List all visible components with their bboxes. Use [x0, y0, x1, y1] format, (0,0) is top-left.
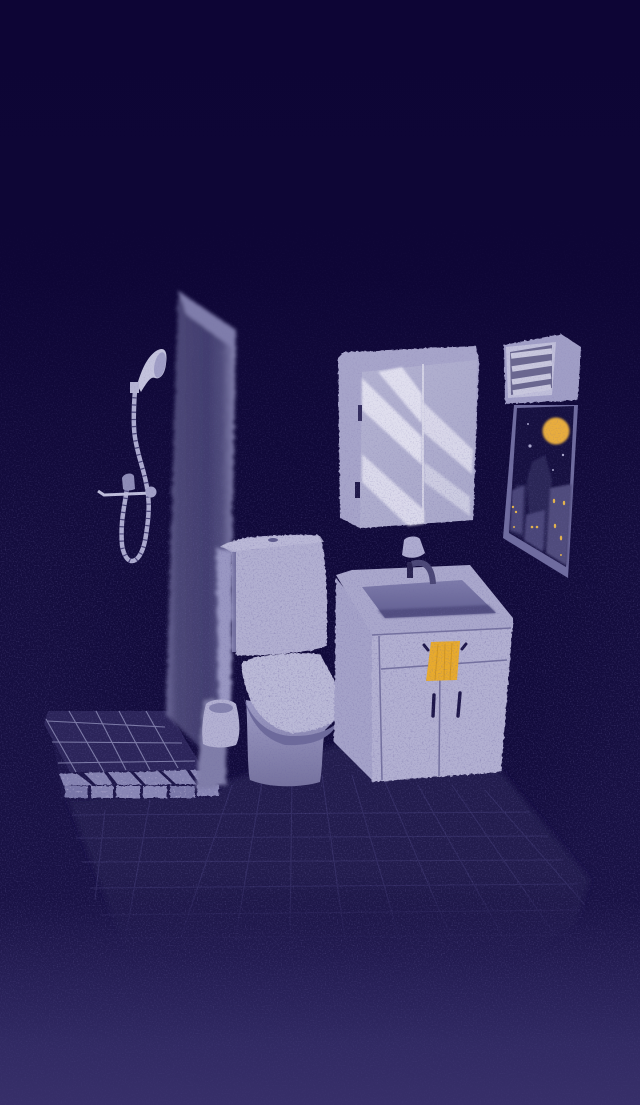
night sky — [509, 406, 574, 567]
cabinet lines — [372, 628, 511, 780]
vanity cabinet with sink — [334, 536, 513, 782]
wall vent — [504, 334, 581, 404]
valve knob — [122, 474, 135, 490]
brush holder — [202, 700, 239, 748]
counter top — [336, 565, 513, 634]
cabinet front — [372, 622, 513, 782]
light beams — [362, 367, 473, 526]
stars and lit windows — [512, 499, 565, 556]
tray front kerb tiles — [59, 770, 222, 798]
toilet brush handle — [216, 548, 233, 705]
towel — [426, 641, 460, 681]
film grain — [0, 274, 640, 1070]
toilet — [202, 535, 342, 786]
shower head — [137, 349, 167, 392]
shower partition wall — [166, 291, 236, 790]
bottom haze — [0, 900, 640, 1105]
cistern — [222, 535, 327, 655]
faucet — [402, 536, 433, 584]
moon — [542, 418, 570, 444]
towel rail ends — [424, 644, 466, 650]
medicine cabinet with mirror — [338, 346, 479, 528]
tray base — [48, 711, 225, 800]
floor: dark tiles — [71, 745, 586, 930]
mirror panels — [360, 360, 477, 528]
city silhouette — [510, 455, 552, 550]
cabinet side — [334, 578, 374, 782]
rim — [243, 695, 338, 745]
cabinet body — [338, 346, 479, 528]
bowl base — [246, 700, 335, 786]
door gap — [422, 364, 424, 522]
shower: head, hose and valve — [98, 349, 168, 561]
hose — [122, 390, 149, 561]
seat — [241, 653, 342, 733]
cabinet handles — [433, 693, 460, 716]
window frame — [503, 405, 578, 578]
hinges — [358, 405, 362, 421]
window with moon and city — [503, 405, 578, 578]
shower tray tiles — [44, 711, 225, 800]
basin — [362, 580, 496, 618]
valve bar — [98, 491, 152, 495]
